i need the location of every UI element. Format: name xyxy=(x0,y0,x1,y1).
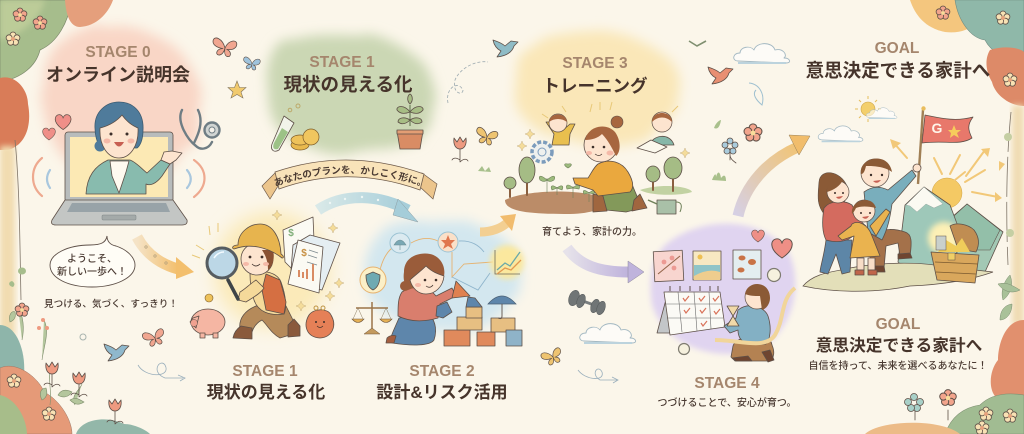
trackpad xyxy=(102,215,136,220)
decorative corner: right trunk xyxy=(1004,105,1024,325)
icon: documents xyxy=(283,217,340,293)
decorative corner: top left foliage xyxy=(0,0,113,150)
man pants xyxy=(731,336,774,361)
man head xyxy=(861,159,892,187)
decorative corner: top right foliage xyxy=(910,0,1024,106)
triangle block xyxy=(452,281,470,298)
icon: spring picture xyxy=(653,250,684,282)
callout: welcome bubble: ようこそ、 xyxy=(67,253,117,265)
text: tagline stage 1: 見つける、気づく、すっきり！ xyxy=(44,298,178,310)
illustration: stage 1 explorer xyxy=(190,210,344,339)
icon: shield circle xyxy=(360,267,386,293)
mountain right front xyxy=(940,204,1000,250)
vest xyxy=(262,274,286,314)
icon: dashed curl top center xyxy=(448,62,488,103)
icon: watering can xyxy=(648,200,681,214)
face xyxy=(584,128,618,162)
icon: star xyxy=(228,81,246,98)
icon: trees xyxy=(504,157,682,197)
illustration: goal family: G xyxy=(932,120,943,136)
watercolor wash: stage 1 top xyxy=(266,31,434,154)
icon: test tube and coins xyxy=(271,104,319,151)
title: goal top: 意思決定できる家計へ xyxy=(806,60,990,81)
legs xyxy=(391,314,436,345)
presenter body xyxy=(86,160,170,194)
icon: umbrella circle xyxy=(390,233,410,253)
arrow: stage 2 to stage 3 xyxy=(480,214,516,232)
title: stage 1 top: 現状の見える化 xyxy=(284,74,413,95)
presenter features xyxy=(104,132,134,146)
title: goal bottom: 自信を持って、未来を選べるあなたに！ xyxy=(808,359,988,372)
title: goal bottom: GOAL xyxy=(876,316,920,333)
boots xyxy=(233,319,300,339)
man torso xyxy=(864,170,916,240)
icon: summer picture xyxy=(693,251,721,280)
screen glow xyxy=(70,137,168,197)
presenter hand xyxy=(161,151,182,164)
decorative corner: bottom left foliage xyxy=(0,303,150,434)
laptop base xyxy=(52,200,187,225)
girl shoes xyxy=(855,270,877,275)
man hand xyxy=(913,164,921,172)
title: stage 4 xyxy=(658,375,796,409)
decorative corner: left trunk xyxy=(0,140,26,336)
face xyxy=(241,243,273,275)
arrow: stage 3 to stage 4 xyxy=(567,248,644,283)
hair xyxy=(262,250,274,270)
arrow: stage 1 to stage 2 xyxy=(318,196,418,222)
sun rising xyxy=(932,178,962,208)
child right xyxy=(637,112,674,153)
ribbon banner xyxy=(262,160,438,200)
watercolor wash: stage 3 xyxy=(513,31,680,145)
title: stage 4: STAGE 4 xyxy=(694,375,760,392)
title: goal bottom xyxy=(808,316,988,372)
soil ground xyxy=(505,192,604,214)
icon: piggy bank xyxy=(190,294,225,338)
woman legs xyxy=(820,240,852,274)
rays and sparkles xyxy=(517,102,690,158)
icon: cloud xyxy=(818,126,863,141)
icon: documents: $ xyxy=(288,228,294,239)
title: stage 0 xyxy=(46,44,190,85)
features xyxy=(243,256,269,266)
presenter bun xyxy=(94,140,106,152)
icon: tulip and butterfly mid xyxy=(452,127,499,172)
title: stage 4: つづけることで、安心が育つ。 xyxy=(658,396,796,409)
icon: network lines xyxy=(380,238,493,290)
text: stage 3 tagline: 育てよう、家計の力。 xyxy=(542,225,642,238)
watercolor wash: stage 2 xyxy=(364,219,520,332)
icon: laptop screen xyxy=(65,132,173,202)
puzzle piece xyxy=(436,302,452,318)
face xyxy=(410,266,444,294)
title: stage 1 top: STAGE 1 xyxy=(309,54,375,71)
torso shirt xyxy=(250,272,286,314)
title: goal top xyxy=(806,40,990,81)
icon: bird top center xyxy=(493,40,518,57)
ground xyxy=(803,263,993,291)
title: stage 1 bottom xyxy=(207,363,325,402)
illustration: goal family xyxy=(803,96,1005,291)
title: stage 0: STAGE 0 xyxy=(85,44,151,61)
blocks xyxy=(444,297,522,346)
title: stage 1 bottom: 現状の見える化 xyxy=(207,383,325,402)
icon: calendar xyxy=(657,286,725,335)
icon: helmet xyxy=(233,224,283,258)
arm xyxy=(238,280,264,302)
ribbon xyxy=(715,288,795,343)
callout: welcome bubble xyxy=(50,236,135,287)
arrow: stage 0 to stage 1 xyxy=(137,237,194,279)
features xyxy=(586,146,614,156)
icon: magnifier xyxy=(207,248,238,299)
girl head xyxy=(852,200,876,222)
mountain peak xyxy=(898,187,965,268)
icon: sound waves xyxy=(33,158,204,197)
title: stage 0: オンライン説明会 xyxy=(46,65,190,85)
arrow: stage 4 to goal xyxy=(738,135,810,216)
snow xyxy=(906,187,943,212)
legs xyxy=(240,306,294,338)
girl legs xyxy=(857,258,875,270)
hourglass xyxy=(727,306,739,326)
bun xyxy=(611,116,623,128)
hair xyxy=(404,254,444,290)
girl dress xyxy=(838,209,890,258)
torso xyxy=(573,161,633,196)
hair xyxy=(585,126,620,156)
icon: umbrella xyxy=(488,296,516,319)
icon: dumbbell xyxy=(567,289,607,316)
title: stage 3: トレーニング xyxy=(542,76,648,96)
sun rays and arrows xyxy=(893,142,998,197)
title: goal bottom: 意思決定できる家計へ xyxy=(816,335,983,355)
icon: coin purse xyxy=(306,306,334,338)
icon: bird and cloud top right xyxy=(689,41,790,105)
illustration: stage 3 gardener xyxy=(504,102,692,214)
icon: curl bottom left xyxy=(138,363,185,381)
icon: butterfly and curl lower center xyxy=(540,347,618,383)
presenter hair back xyxy=(95,102,143,148)
icon: cloud near sun xyxy=(866,108,897,118)
title: stage 1 bottom: STAGE 1 xyxy=(232,363,298,380)
icon: gear xyxy=(532,142,552,162)
watercolor wash: stage 1 glow xyxy=(214,212,330,328)
mountain right xyxy=(935,204,1003,272)
icon: balance scale xyxy=(352,302,392,334)
illustration: laptop presenter xyxy=(52,102,187,225)
title: stage 3 xyxy=(542,55,648,96)
icon: hearts xyxy=(43,115,71,140)
watercolor wash: stage 4 xyxy=(651,224,795,354)
woman hair back xyxy=(818,173,848,215)
man head xyxy=(745,284,770,310)
icon: butterflies top xyxy=(211,37,261,71)
icon: chart circle xyxy=(490,245,524,279)
boots xyxy=(593,194,647,212)
woman torso xyxy=(823,202,866,242)
man feet xyxy=(872,253,912,272)
torso and arm xyxy=(398,288,456,321)
presenter face xyxy=(100,115,138,158)
title: stage 3: STAGE 3 xyxy=(562,55,628,72)
title: stage 1 top xyxy=(284,54,413,95)
pants xyxy=(596,184,642,212)
title: stage 2: 設計&リスク活用 xyxy=(376,383,508,402)
title: goal top: GOAL xyxy=(875,40,919,57)
flag pole xyxy=(918,110,923,184)
icon: potted plant xyxy=(397,94,423,149)
keyboard xyxy=(67,203,170,212)
man torso xyxy=(724,306,770,345)
flag xyxy=(922,115,973,143)
decorative corner: bottom right foliage xyxy=(865,275,1024,434)
ribbon banner: あなたのプランを、かしこく形に。 xyxy=(274,165,420,186)
man legs xyxy=(866,229,911,268)
illustration: stage 2 builder xyxy=(352,232,524,346)
icon: flowers mid right xyxy=(712,120,762,181)
icon: star circle xyxy=(438,232,458,252)
icon: stethoscope xyxy=(180,110,220,149)
icon: small sun xyxy=(855,96,881,122)
icon: butterfly and bird bottom left xyxy=(80,328,166,361)
icon: clocks xyxy=(678,268,780,354)
icon: documents: $ xyxy=(301,248,307,259)
illustration: stage 4 xyxy=(653,230,795,362)
icon: autumn picture xyxy=(733,250,761,279)
icon: hearts xyxy=(752,230,792,258)
callout: welcome bubble: 新しい一歩へ！ xyxy=(57,265,127,278)
sparkles and rays xyxy=(192,210,344,311)
title: stage 2 xyxy=(376,363,508,402)
icon: seedlings xyxy=(539,164,595,202)
title: stage 2: STAGE 2 xyxy=(409,363,475,380)
watercolor wash: stage 0 xyxy=(42,28,202,180)
presenter shirt xyxy=(110,161,129,193)
arrowheads xyxy=(890,139,1005,202)
woman face xyxy=(827,180,849,203)
icon: flowers bottom right xyxy=(904,390,956,420)
icon: cloud lower center xyxy=(580,324,636,343)
treasure chest xyxy=(928,222,979,283)
child left xyxy=(546,114,575,145)
